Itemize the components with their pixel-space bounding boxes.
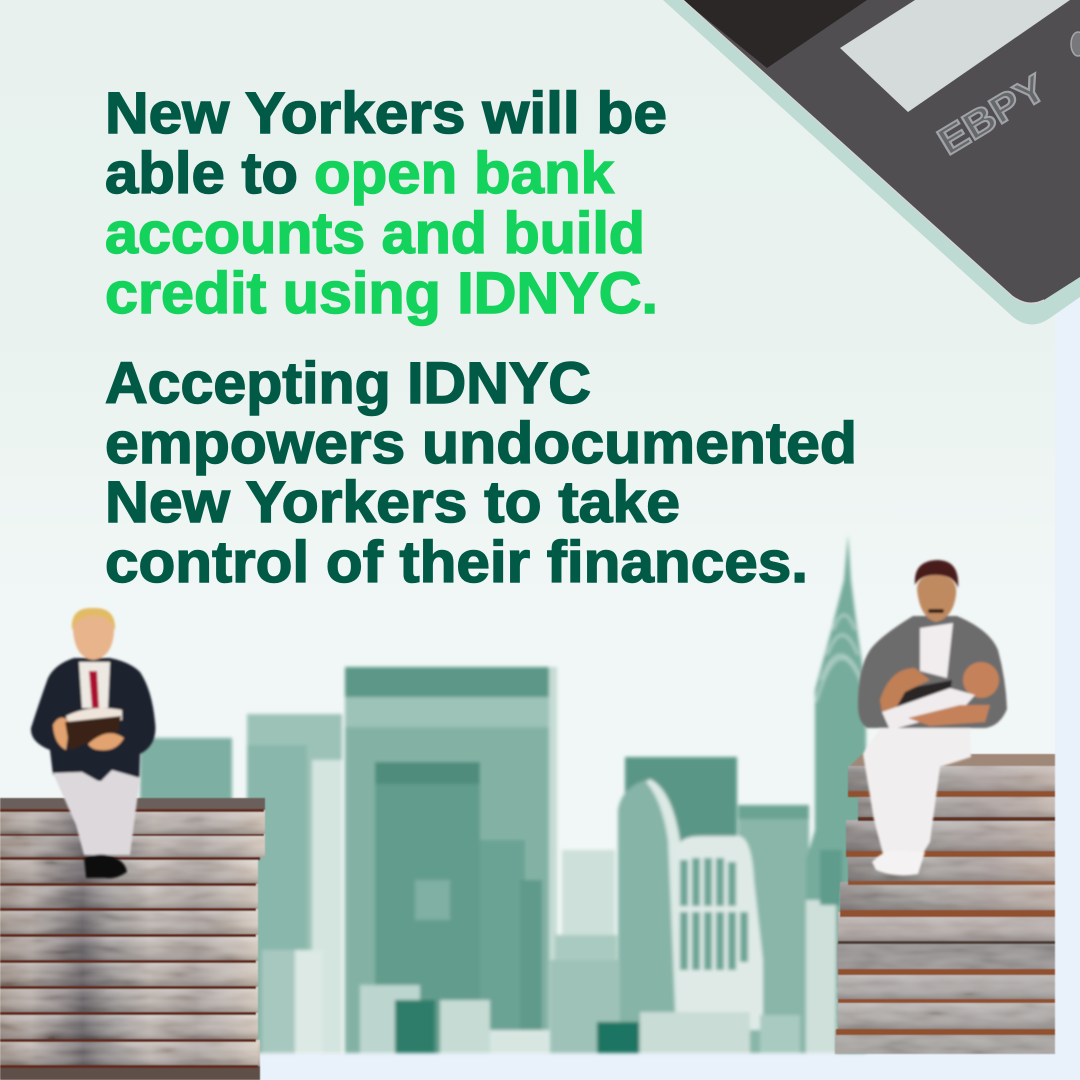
shirt [920, 623, 953, 678]
hair [915, 560, 958, 588]
figure: man in suit reading on left stack [31, 608, 155, 878]
heading: open bank accounts [105, 81, 667, 326]
baby body [882, 688, 975, 730]
text block: empowerment statement: control of their finances. [105, 530, 808, 595]
tie [89, 671, 99, 708]
card edge highlight [683, 0, 1044, 303]
text block: empowerment statement: empowers undocumented [105, 411, 857, 476]
head [73, 609, 114, 660]
baby head [963, 662, 999, 698]
left hand [53, 718, 70, 750]
jacket [31, 658, 155, 786]
head [917, 575, 956, 622]
right hand [88, 733, 124, 750]
signature strip [840, 0, 1070, 112]
text block: empowerment statement: Accepting IDNYC [105, 351, 591, 416]
heading: open bank accounts: open bank [314, 141, 615, 206]
text block: empowerment statement: New Yorkers to take [105, 470, 680, 535]
shoes [84, 854, 127, 878]
heading: open bank accounts: credit using IDNYC. [105, 261, 658, 326]
book pages [66, 708, 122, 724]
credit card corner [663, 0, 1080, 325]
heading: open bank accounts: able to [105, 141, 298, 206]
magnetic stripe [683, 0, 867, 68]
heading: open bank accounts: accounts and build [105, 201, 645, 266]
skyline: blurred teal buildings [140, 535, 866, 1053]
book [895, 680, 952, 712]
heading: open bank accounts: New Yorkers will be [105, 81, 667, 146]
text block: empowerment statement [105, 351, 857, 595]
trousers [53, 770, 140, 855]
card body [683, 0, 1080, 303]
book cover [65, 716, 121, 750]
card shadow band [663, 0, 1080, 325]
jacket [858, 616, 1007, 728]
father's hand and forearm [908, 705, 990, 726]
embossed characters: EBPY [931, 67, 1054, 164]
coin stack: left [0, 798, 265, 1080]
shoes [872, 850, 925, 875]
moustache [928, 609, 944, 613]
figure: father holding baby on right stack [858, 560, 1007, 875]
shirt [79, 662, 110, 708]
trousers [863, 728, 971, 858]
coin stack: right [835, 754, 1055, 1054]
father's arm [880, 668, 930, 712]
hair [72, 608, 115, 630]
embossed partial character [1071, 32, 1080, 56]
